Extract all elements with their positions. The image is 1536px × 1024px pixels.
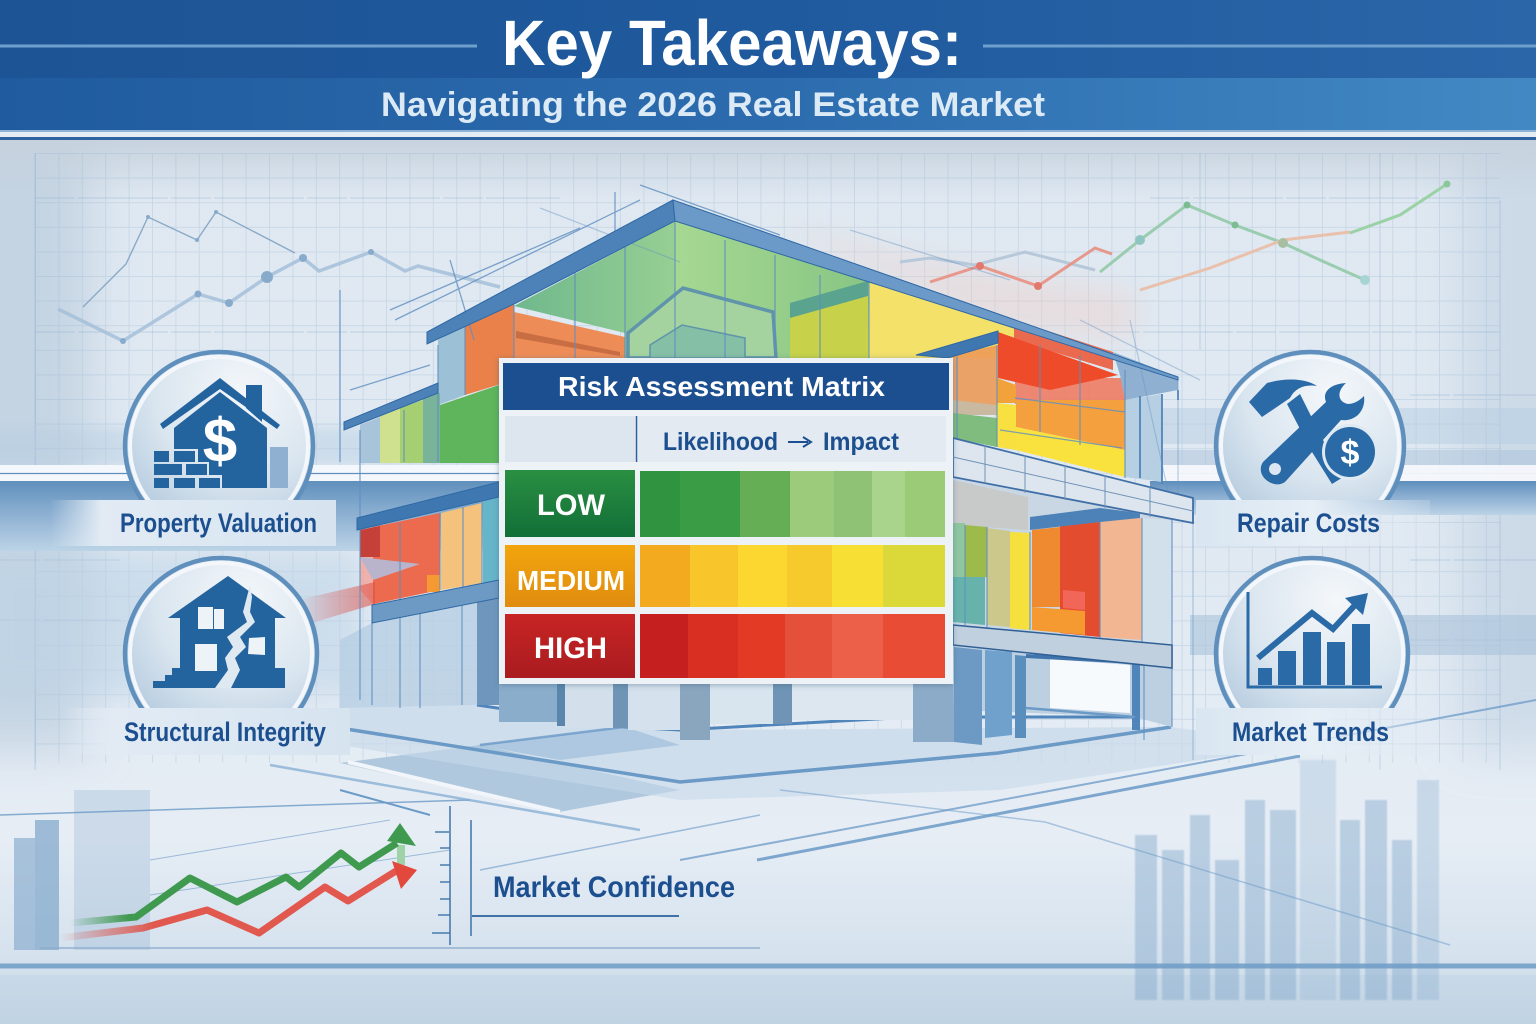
title rules xyxy=(0,44,1536,48)
green left wing xyxy=(380,385,499,463)
left mid floor slab xyxy=(357,482,499,623)
building illustration xyxy=(298,185,1200,760)
baseline rules xyxy=(0,964,1536,968)
panel: risk assessment matrix xyxy=(499,358,953,684)
confidence scale axes xyxy=(432,806,679,945)
label panel xyxy=(50,500,336,546)
icon disc xyxy=(1214,350,1406,500)
item: market trends xyxy=(1196,558,1430,755)
chart lines top right xyxy=(770,180,1450,340)
likelihood label: Likelihood xyxy=(663,428,778,456)
row: high xyxy=(505,614,945,678)
subtitle: Navigating the 2026 Real Estate Market xyxy=(381,86,1045,124)
building wireframe lines xyxy=(340,185,1200,760)
title: Key Takeaways: xyxy=(502,7,962,79)
background side and top shading xyxy=(0,130,1536,750)
icon: house with dollar and bricks xyxy=(154,378,288,488)
chart lines top left xyxy=(58,210,500,344)
arrow: likelihood to impact xyxy=(788,437,811,447)
matrix title: Risk Assessment Matrix xyxy=(558,371,885,402)
matrix title bar xyxy=(503,363,949,410)
ground floor structure xyxy=(340,598,1172,745)
axis header row xyxy=(505,416,946,462)
row: medium xyxy=(505,545,945,607)
item: property valuation xyxy=(50,352,336,546)
subtitle band xyxy=(0,78,1536,130)
impact label: Impact xyxy=(823,428,900,456)
ground plane perspective xyxy=(0,700,1536,945)
market confidence label: Market Confidence xyxy=(493,871,735,904)
upper storey glass xyxy=(438,325,465,405)
label panel xyxy=(62,708,350,755)
orange upper left facade xyxy=(465,303,625,395)
lower right facade xyxy=(953,478,1193,660)
icon: hammer, wrench and coin xyxy=(1249,380,1378,484)
horizontal architectural bands xyxy=(0,408,1536,695)
red confidence line xyxy=(60,861,417,938)
icon disc xyxy=(1214,556,1410,708)
label panel xyxy=(1196,708,1430,755)
lower left red block xyxy=(298,503,482,625)
header: title band xyxy=(0,0,1536,140)
bottom decorative bar charts xyxy=(0,760,1536,1024)
roof beams xyxy=(344,200,1178,430)
medium label: MEDIUM xyxy=(517,565,625,596)
icon: bar chart with rising arrow xyxy=(1248,592,1382,687)
chart: market confidence xyxy=(0,806,1536,966)
icon: cracked house xyxy=(153,576,286,688)
label panel xyxy=(1196,500,1430,546)
label: Market Trends xyxy=(1232,717,1389,747)
low label: LOW xyxy=(537,489,606,522)
label: Repair Costs xyxy=(1237,508,1380,538)
teal lower glass by matrix xyxy=(483,494,499,583)
header bottom rules xyxy=(0,130,1536,132)
blueprint grid background xyxy=(0,153,1536,770)
yellow roof facade xyxy=(869,270,1015,358)
high label: HIGH xyxy=(534,632,607,665)
icon: hammer, wrench and coin: $ xyxy=(1341,434,1360,472)
icon disc xyxy=(122,556,320,708)
item: repair costs xyxy=(1196,352,1430,546)
icon disc xyxy=(122,350,316,500)
row: low xyxy=(505,470,945,537)
icon: house with dollar and bricks: $ xyxy=(203,407,237,476)
green confidence line xyxy=(70,823,416,923)
right mid floor slab xyxy=(953,438,1193,668)
item: structural integrity xyxy=(62,558,350,755)
green upper facade xyxy=(514,221,869,358)
label: Property Valuation xyxy=(120,508,317,538)
label: Structural Integrity xyxy=(124,717,326,747)
right block facade xyxy=(953,320,1178,484)
